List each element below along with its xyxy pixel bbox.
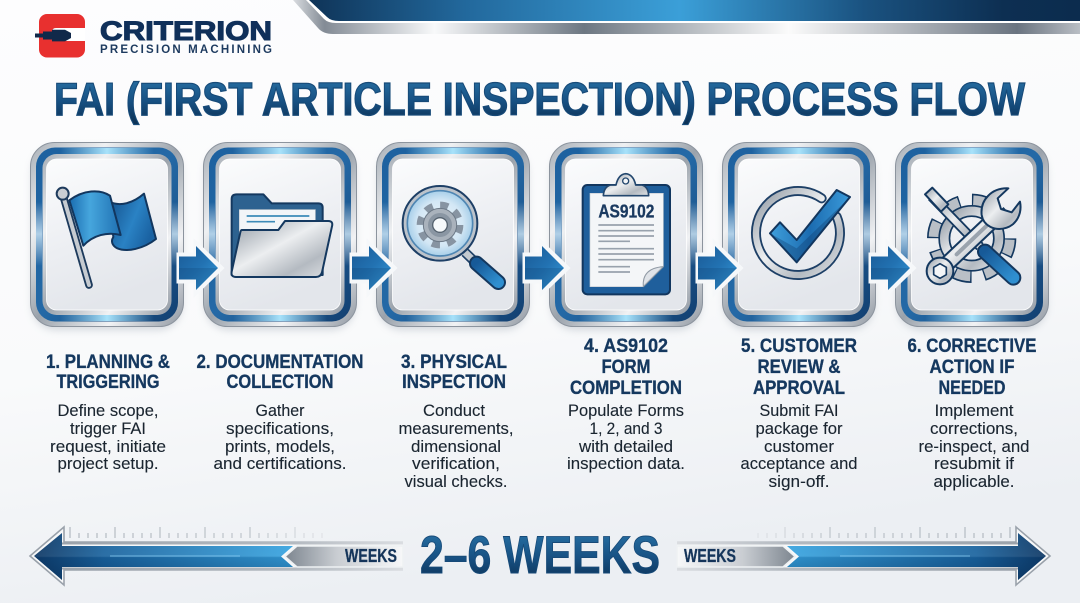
timeline arrow: right: WEEKS bbox=[684, 546, 736, 566]
icon: folder bbox=[232, 194, 332, 277]
text block: step 4: with detailed bbox=[578, 437, 673, 456]
arrow: step 4 to 5 bbox=[698, 244, 740, 292]
text block: step 3: Conduct bbox=[423, 401, 485, 420]
panel: step 2 card bbox=[204, 142, 356, 330]
text block: step 1: request, initiate bbox=[50, 437, 166, 456]
timeline arrow: right bbox=[677, 527, 1050, 585]
panel: step 1 card bbox=[30, 142, 184, 330]
text block: step 6: applicable. bbox=[934, 472, 1014, 491]
text block: step 5: APPROVAL bbox=[753, 377, 845, 399]
text block: step 6: NEEDED bbox=[938, 377, 1006, 399]
text block: step 1 bbox=[46, 351, 170, 473]
arrow: step 2 to 3 bbox=[352, 244, 394, 292]
text block: step 3: measurements, bbox=[398, 419, 514, 438]
panel: step 4 card bbox=[550, 142, 702, 330]
text block: step 1: 1. PLANNING & bbox=[46, 351, 170, 373]
text block: step 2 bbox=[196, 351, 364, 473]
icon: AS9102 clipboard: AS9102 bbox=[598, 201, 654, 222]
icon: flag bbox=[57, 188, 156, 285]
text block: step 5: sign-off. bbox=[768, 472, 830, 491]
icon: wrench, screwdriver and gear bbox=[925, 188, 1021, 284]
text block: step 2: COLLECTION bbox=[226, 371, 334, 393]
text block: step 4: 1, 2, and 3 bbox=[590, 419, 662, 438]
icon: AS9102 clipboard bbox=[583, 174, 670, 294]
text block: step 1: project setup. bbox=[58, 454, 158, 473]
header ribbon bbox=[293, 0, 1080, 34]
text block: step 3: verification, bbox=[412, 454, 500, 473]
text block: step 1: TRIGGERING bbox=[56, 371, 160, 393]
text block: step 2: and certifications. bbox=[214, 454, 346, 473]
text block: step 6: ACTION IF bbox=[930, 356, 1015, 378]
icon: check mark in ring bbox=[756, 190, 850, 275]
arrow: step 5 to 6 bbox=[871, 244, 913, 292]
text block: step 6: corrections, bbox=[930, 419, 1018, 438]
logo: Criterion Precision Machining bbox=[35, 14, 272, 58]
text block: step 2: Gather bbox=[256, 401, 305, 420]
text block: step 5: 5. CUSTOMER bbox=[741, 335, 857, 357]
text block: step 4: COMPLETION bbox=[570, 377, 682, 399]
text block: step 4: 4. AS9102 bbox=[584, 335, 668, 357]
text block: step 6: Implement bbox=[934, 401, 1014, 420]
text block: step 4: Populate Forms bbox=[568, 401, 684, 420]
text block: step 5: package for bbox=[756, 419, 843, 438]
text block: step 2: 2. DOCUMENTATION bbox=[196, 351, 364, 373]
arrow: step 3 to 4 bbox=[525, 244, 567, 292]
timeline arrow: left: WEEKS bbox=[345, 546, 397, 566]
text block: step 1: Define scope, bbox=[58, 401, 158, 420]
text block: step 2: prints, models, bbox=[225, 437, 335, 456]
text block: step 6: re-inspect, and bbox=[918, 437, 1030, 456]
timeline arrow: left bbox=[30, 527, 403, 585]
text block: step 1: trigger FAI bbox=[70, 419, 146, 438]
panel: step 3 card bbox=[376, 142, 530, 330]
text block: step 2: specifications, bbox=[226, 419, 334, 438]
text block: step 5: acceptance and bbox=[740, 454, 858, 473]
text block: step 3: dimensional bbox=[411, 437, 501, 456]
panel: step 6 card bbox=[896, 142, 1048, 330]
text block: step 6 bbox=[908, 335, 1036, 491]
tagline: PRECISION MACHINING bbox=[100, 44, 272, 56]
duration label: 2–6 WEEKS bbox=[420, 526, 660, 585]
text block: step 4: FORM bbox=[602, 356, 650, 378]
text block: step 3: 3. PHYSICAL bbox=[401, 351, 507, 373]
text block: step 3 bbox=[398, 351, 514, 491]
arrow: step 1 to 2 bbox=[179, 244, 221, 292]
text block: step 6: resubmit if bbox=[934, 454, 1014, 473]
text block: step 5: Submit FAI bbox=[760, 401, 838, 420]
text block: step 4 bbox=[567, 335, 685, 473]
text block: step 5: customer bbox=[764, 437, 834, 456]
icon: red C with spindle bbox=[35, 14, 85, 58]
text block: step 6: 6. CORRECTIVE bbox=[908, 335, 1036, 357]
panel: step 5 card bbox=[722, 142, 876, 330]
text block: step 3: visual checks. bbox=[404, 472, 508, 491]
text block: step 5 bbox=[740, 335, 858, 491]
icon: magnifier with gear bbox=[403, 186, 498, 282]
text block: step 3: INSPECTION bbox=[402, 371, 506, 393]
text block: step 5: REVIEW & bbox=[758, 356, 840, 378]
text block: step 4: inspection data. bbox=[567, 454, 685, 473]
wordmark: CRITERION bbox=[100, 16, 272, 46]
